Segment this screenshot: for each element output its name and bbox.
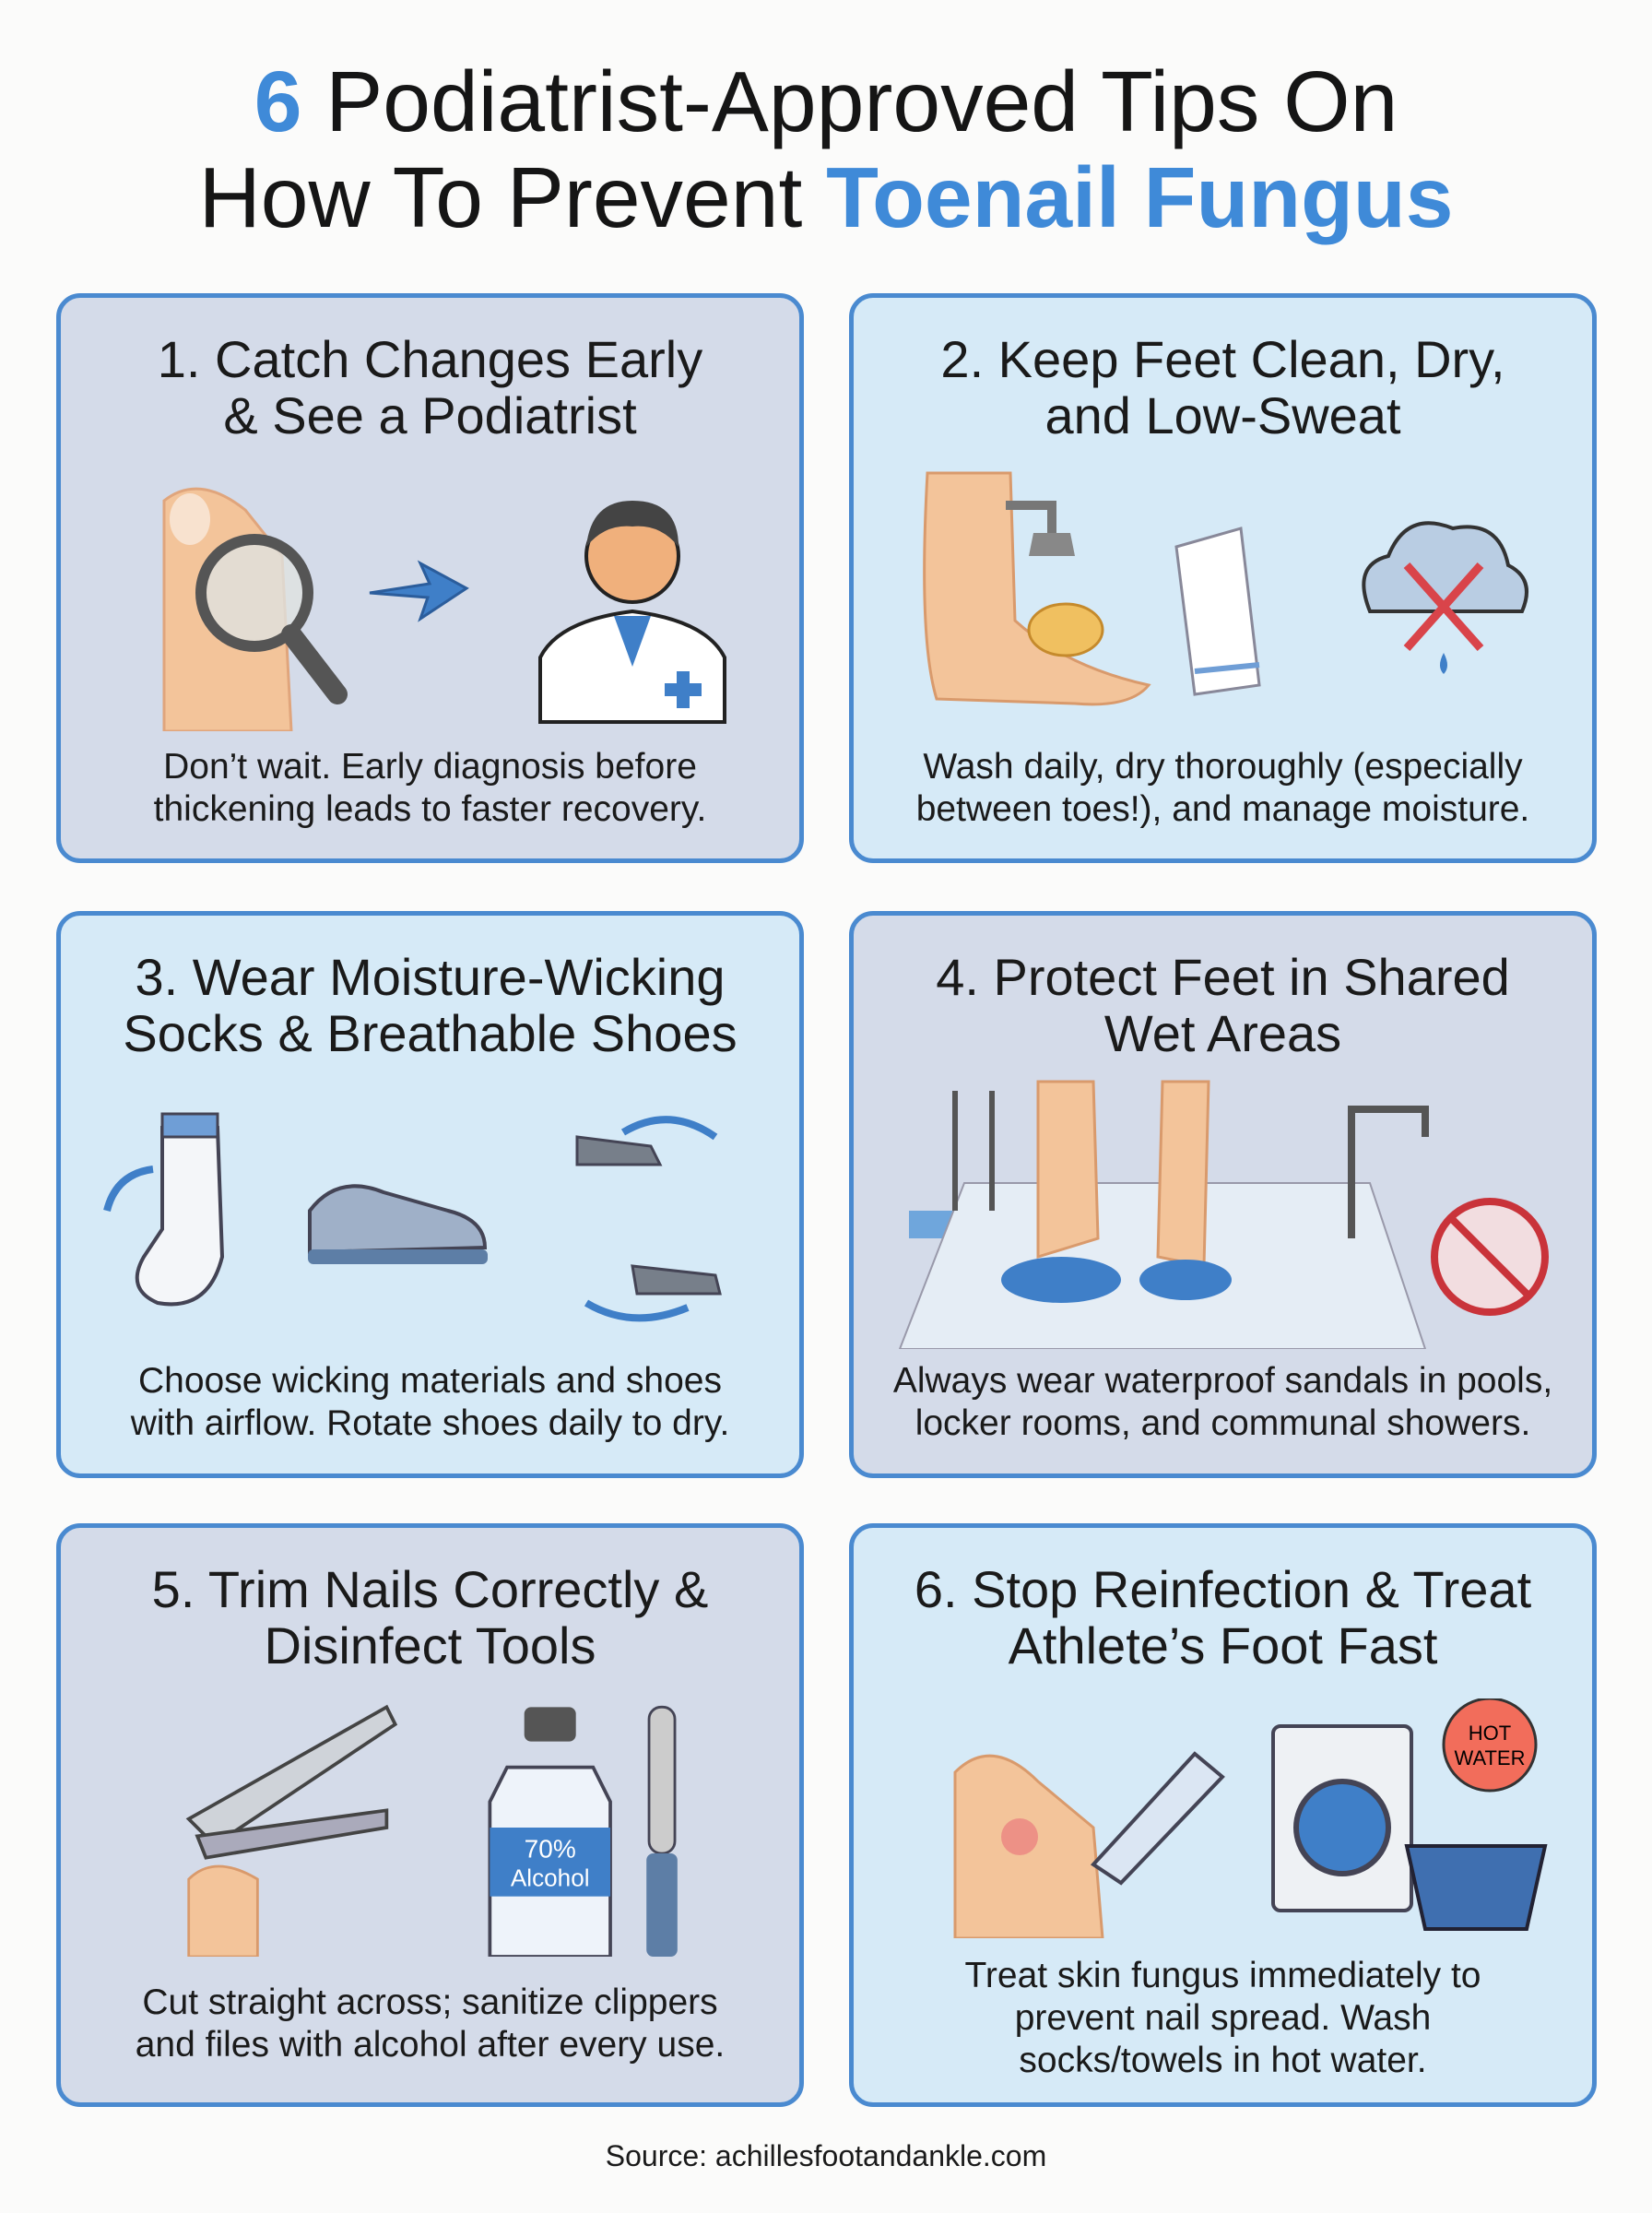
illustration: toes cream, washer, hot water: HOT	[1469, 1722, 1511, 1745]
body text 3	[131, 1361, 729, 1443]
body text 5: Cut straight across; sanitize clippers	[142, 1982, 718, 2022]
heading 6	[914, 1560, 1531, 1675]
body text 3: with airflow. Rotate shoes daily to dry.	[131, 1403, 729, 1443]
body text 4: Always wear waterproof sandals in pools,	[893, 1361, 1552, 1401]
title	[199, 53, 1453, 245]
heading 2: 2. Keep Feet Clean, Dry,	[940, 330, 1505, 388]
body text 1: thickening leads to faster recovery.	[154, 789, 706, 829]
body text 1: Don’t wait. Early diagnosis before	[163, 747, 697, 787]
body text 2: between toes!), and manage moisture.	[916, 789, 1529, 829]
panel: 2 keep feet clean	[849, 293, 1597, 863]
heading 6: 6. Stop Reinfection & Treat	[914, 1560, 1531, 1618]
heading 1: 1. Catch Changes Early	[158, 330, 702, 388]
body text 2: Wash daily, dry thoroughly (especially	[923, 747, 1523, 787]
heading 1: & See a Podiatrist	[223, 386, 637, 444]
title: How To Prevent Toenail Fungus	[199, 149, 1453, 245]
heading 6: Athlete’s Foot Fast	[1009, 1616, 1437, 1675]
body text 6: socks/towels in hot water.	[1019, 2041, 1427, 2080]
illustration: pool, flip flops, no bare feet	[899, 1081, 1549, 1349]
heading 4: 4. Protect Feet in Shared	[936, 948, 1510, 1006]
panel: 1 catch changes early	[56, 293, 804, 863]
panel: 6 stop reinfection	[849, 1523, 1597, 2107]
source footer: Source: achillesfootandankle.com	[606, 2139, 1046, 2172]
heading 2	[940, 330, 1505, 444]
illustration: washing foot, towel, cloud	[923, 472, 1528, 706]
heading 4: Wet Areas	[1104, 1004, 1341, 1062]
title: 6 Podiatrist-Approved Tips On	[254, 53, 1398, 149]
body text 2	[916, 747, 1529, 829]
panel: 5 trim nails	[56, 1523, 804, 2107]
body text 4: locker rooms, and communal showers.	[915, 1403, 1530, 1443]
illustration: sock, sneaker, rotating shoes	[103, 1112, 722, 1322]
body text 5	[136, 1982, 725, 2065]
heading 3	[123, 948, 738, 1062]
body text 6: Treat skin fungus immediately to	[965, 1956, 1481, 1995]
illustration: clippers, alcohol bottle, file: Alcohol	[511, 1864, 590, 1891]
body text 3: Choose wicking materials and shoes	[138, 1361, 722, 1401]
heading 5	[152, 1560, 708, 1675]
heading 5: Disinfect Tools	[264, 1616, 596, 1675]
illustration: clippers, alcohol bottle, file	[186, 1704, 678, 1957]
body text 6: prevent nail spread. Wash	[1015, 1998, 1431, 2038]
body text 6	[965, 1956, 1481, 2080]
body text 4	[893, 1361, 1552, 1443]
illustration: clippers, alcohol bottle, file: 70%	[525, 1835, 576, 1864]
heading 1	[158, 330, 702, 444]
illustration: toe magnifier doctor	[162, 487, 726, 731]
illustration: toes cream, washer, hot water	[953, 1698, 1547, 1938]
heading 3: Socks & Breathable Shoes	[123, 1004, 738, 1062]
heading 3: 3. Wear Moisture-Wicking	[135, 948, 725, 1006]
illustration: toes cream, washer, hot water: WATER	[1455, 1746, 1525, 1769]
panel: 4 shared wet areas	[849, 911, 1597, 1478]
heading 4	[936, 948, 1510, 1062]
heading 2: and Low-Sweat	[1044, 386, 1401, 444]
panel: 3 socks and shoes	[56, 911, 804, 1478]
body text 5: and files with alcohol after every use.	[136, 2025, 725, 2065]
body text 1	[154, 747, 706, 829]
heading 5: 5. Trim Nails Correctly &	[152, 1560, 708, 1618]
